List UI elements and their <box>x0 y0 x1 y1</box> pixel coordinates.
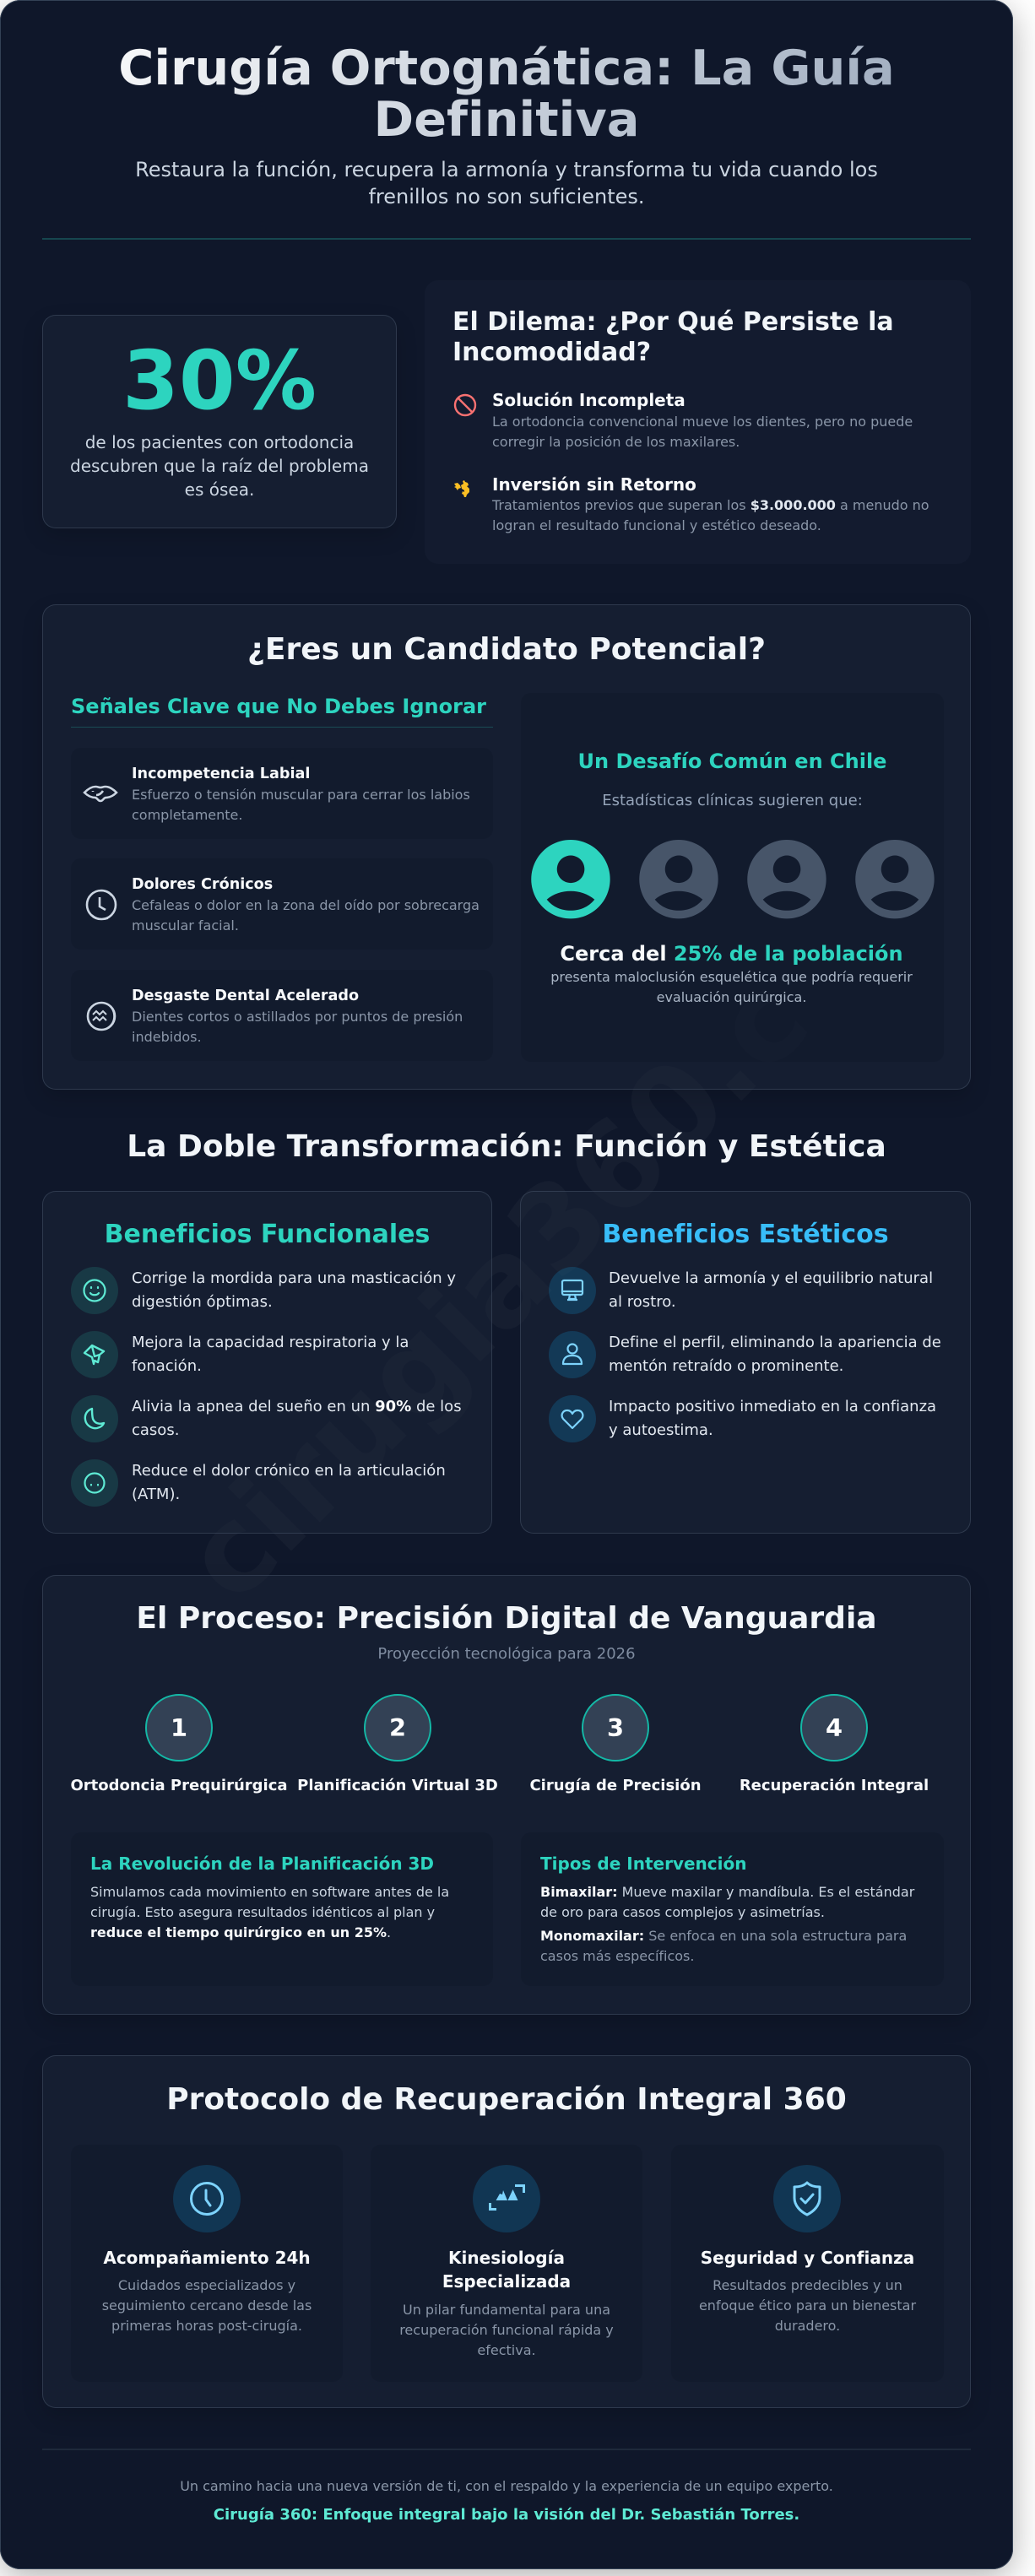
panel: el dilema <box>425 280 971 564</box>
step 4 number <box>800 1694 868 1762</box>
dilemma heading: Incomodidad? <box>452 338 651 367</box>
heading: Protocolo de Recuperación Integral 360 <box>166 2082 847 2117</box>
text: (ATM). <box>132 1486 180 1503</box>
step 3 number <box>582 1694 649 1762</box>
text: Esfuerzo o tensión muscular para cerrar los labios <box>132 787 470 803</box>
statistic: Cerca del 25% de la población <box>560 942 903 966</box>
card: acompanamiento <box>71 2145 343 2382</box>
title <box>442 2248 571 2292</box>
step 1 number <box>145 1694 213 1762</box>
monomaxilar: Monomaxilar: Se enfoca en una sola estructura para <box>540 1928 907 1944</box>
panel: el proceso <box>42 1575 971 2015</box>
text: muscular facial. <box>132 917 239 934</box>
panel: 30% stat <box>42 315 397 528</box>
item text: La ortodoncia convencional mueve los dientes, pero no puede <box>492 414 913 430</box>
text <box>609 1334 941 1375</box>
panel: protocolo <box>42 2055 971 2408</box>
text: al rostro. <box>609 1293 676 1311</box>
icon: lips <box>83 785 118 802</box>
panel: desafio en chile <box>521 693 944 1062</box>
text: fonación. <box>132 1357 202 1375</box>
item text: logran el resultado funcional y estético deseado. <box>492 517 821 533</box>
heading: La Revolución de la Planificación 3D <box>90 1854 434 1874</box>
card: seguridad <box>671 2145 944 2382</box>
icon: heart <box>549 1395 596 1442</box>
signal: dolores cronicos <box>71 858 493 950</box>
step 3 label: Cirugía de Precisión <box>529 1777 702 1794</box>
subtitle: frenillos no son suficientes. <box>368 185 645 208</box>
footer brand: Cirugía 360: Enfoque integral bajo la visión del Dr. Sebastián Torres. <box>214 2506 799 2524</box>
icon: smile <box>71 1267 118 1314</box>
step 3 number: 3 <box>607 1713 624 1742</box>
text <box>132 1269 456 1311</box>
icon: neutral face <box>71 1459 118 1507</box>
text: reduce el tiempo quirúrgico en un 25%. <box>90 1924 391 1940</box>
signal: incompetencia labial <box>71 748 493 839</box>
dilemma heading <box>452 307 894 367</box>
text: digestión óptimas. <box>132 1293 273 1311</box>
icon: moon <box>71 1395 118 1442</box>
signals heading: Señales Clave que No Debes Ignorar <box>71 695 486 718</box>
text: efectiva. <box>477 2342 536 2358</box>
stat description <box>70 432 369 500</box>
text <box>609 1398 936 1439</box>
heading: El Proceso: Precisión Digital de Vanguardia <box>136 1601 877 1636</box>
text: completamente. <box>132 807 242 823</box>
item title: solucion incompleta: Solución Incompleta <box>492 390 685 410</box>
icon: clock <box>86 890 117 920</box>
text: recuperación funcional rápida y <box>399 2322 614 2338</box>
text: y autoestima. <box>609 1421 713 1439</box>
text: indebidos. <box>132 1029 202 1045</box>
panel: beneficios funcionales <box>42 1191 492 1534</box>
bimaxilar: de oro para casos complejos y asimetrías. <box>540 1904 825 1920</box>
footer note: Un camino hacia una nueva versión de ti, con el respaldo y la experiencia de un equipo experto. <box>180 2478 833 2494</box>
monomaxilar: casos más específicos. <box>540 1948 694 1964</box>
step 1 number: 1 <box>171 1713 187 1742</box>
pictogram: 1 of 4 people <box>531 840 935 918</box>
item text: corregir la posición de los maxilares. <box>492 434 740 450</box>
text: Cefaleas o dolor en la zona del oído por sobrecarga <box>132 897 480 913</box>
text: primeras horas post-cirugía. <box>111 2318 302 2334</box>
text: Un pilar fundamental para una <box>403 2302 610 2318</box>
lead text: Estadísticas clínicas sugieren que: <box>602 792 863 809</box>
text: Mejora la capacidad respiratoria y la <box>132 1334 409 1351</box>
step 2 number <box>364 1694 431 1762</box>
text <box>132 787 470 823</box>
signal: desgaste dental <box>71 970 493 1061</box>
title: Acompañamiento 24h <box>103 2248 311 2268</box>
subtitle <box>135 158 878 208</box>
stat description: de los pacientes con ortodoncia <box>85 432 354 452</box>
heading: ¿Eres un Candidato Potencial? <box>247 632 766 667</box>
icon: shield <box>773 2165 841 2232</box>
statistic note: presenta maloclusión esquelética que podría requerir <box>550 969 913 985</box>
title: Dolores Crónicos <box>132 876 273 893</box>
text: Simulamos cada movimiento en software antes de la <box>90 1884 449 1900</box>
text: casos. <box>132 1421 179 1439</box>
item title: inversion sin retorno: Inversión sin Retorno <box>492 474 696 495</box>
card: kinesiologia <box>371 2145 642 2382</box>
text: Impacto positivo inmediato en la confianza <box>609 1398 936 1415</box>
text <box>609 1269 933 1311</box>
subheading: Proyección tecnológica para 2026 <box>377 1645 636 1663</box>
panel: beneficios esteticos <box>520 1191 971 1534</box>
icon: worn tooth <box>86 1001 117 1031</box>
statistic note: evaluación quirúrgica. <box>657 989 806 1005</box>
panel: candidato <box>42 604 971 1090</box>
panel: tipos de intervencion <box>521 1832 944 1986</box>
stat number: 30% <box>122 333 317 428</box>
title: Desgaste Dental Acelerado <box>132 988 359 1004</box>
icon: movement <box>473 2165 540 2232</box>
text: Devuelve la armonía y el equilibrio natural <box>609 1269 933 1287</box>
statistic note <box>550 969 913 1005</box>
text: Corrige la mordida para una masticación y <box>132 1269 456 1287</box>
title: Especializada <box>442 2271 571 2292</box>
text <box>102 2277 312 2334</box>
bimaxilar <box>540 1884 915 1920</box>
title: Definitiva <box>373 91 639 148</box>
heading: Un Desafío Común en Chile <box>578 750 886 773</box>
text <box>132 1334 409 1375</box>
text: mentón retraído o prominente. <box>609 1357 843 1375</box>
title: Cirugía Ortognática: La Guía <box>118 40 895 96</box>
step 2 label: Planificación Virtual 3D <box>297 1777 498 1794</box>
icon: money <box>454 480 469 497</box>
step 4 number: 4 <box>826 1713 843 1742</box>
monomaxilar <box>540 1928 907 1964</box>
text: Alivia la apnea del sueño en un 90% de los <box>132 1398 462 1415</box>
text: Define el perfil, eliminando la apariencia de <box>609 1334 941 1351</box>
dilemma heading: El Dilema: ¿Por Qué Persiste la <box>452 307 894 337</box>
icon: person <box>549 1331 596 1378</box>
title: Kinesiología <box>448 2248 565 2268</box>
text <box>132 1009 463 1045</box>
text: Resultados predecibles y un <box>713 2277 902 2293</box>
heading: doble transformacion: La Doble Transformación: Función y Estética <box>127 1129 886 1164</box>
title: Seguridad y Confianza <box>701 2248 914 2268</box>
icon: breath <box>71 1331 118 1378</box>
text: Reduce el dolor crónico en la articulación <box>132 1462 446 1480</box>
step 1 label: Ortodoncia Prequirúrgica <box>70 1777 288 1794</box>
item text <box>492 414 913 450</box>
icon: ban <box>454 393 476 417</box>
panel: planificacion 3D <box>71 1832 493 1986</box>
stat description: descubren que la raíz del problema <box>70 456 369 476</box>
text <box>90 1884 449 1940</box>
icon: clock <box>173 2165 241 2232</box>
text <box>132 897 480 934</box>
step 4 label: Recuperación Integral <box>740 1777 929 1794</box>
title: Incompetencia Labial <box>132 766 310 782</box>
text: enfoque ético para un bienestar <box>699 2297 916 2314</box>
text <box>399 2302 614 2358</box>
text: Dientes cortos o astillados por puntos de presión <box>132 1009 463 1025</box>
subtitle: Restaura la función, recupera la armonía y transforma tu vida cuando los <box>135 158 878 181</box>
text <box>132 1462 446 1503</box>
watermark: cirugia360.c <box>158 951 834 1627</box>
step 2 number: 2 <box>389 1713 406 1742</box>
text: seguimiento cercano desde las <box>102 2297 312 2314</box>
title <box>42 42 971 147</box>
heading: Beneficios Estéticos <box>602 1220 889 1249</box>
text: cirugía. Esto asegura resultados idénticos al plan y <box>90 1904 435 1920</box>
item text <box>491 497 929 533</box>
text <box>699 2277 917 2334</box>
text <box>132 1398 462 1439</box>
stat description: es ósea. <box>185 479 254 500</box>
text: duradero. <box>775 2318 840 2334</box>
icon: monitor <box>549 1267 596 1314</box>
item text: Tratamientos previos que superan los $3.000.000 a menudo no <box>492 497 929 513</box>
bimaxilar: Bimaxilar: Mueve maxilar y mandíbula. Es el estándar <box>540 1884 914 1900</box>
text: Cuidados especializados y <box>118 2277 295 2293</box>
heading: Tipos de Intervención <box>540 1854 746 1874</box>
heading: Beneficios Funcionales <box>105 1220 430 1249</box>
